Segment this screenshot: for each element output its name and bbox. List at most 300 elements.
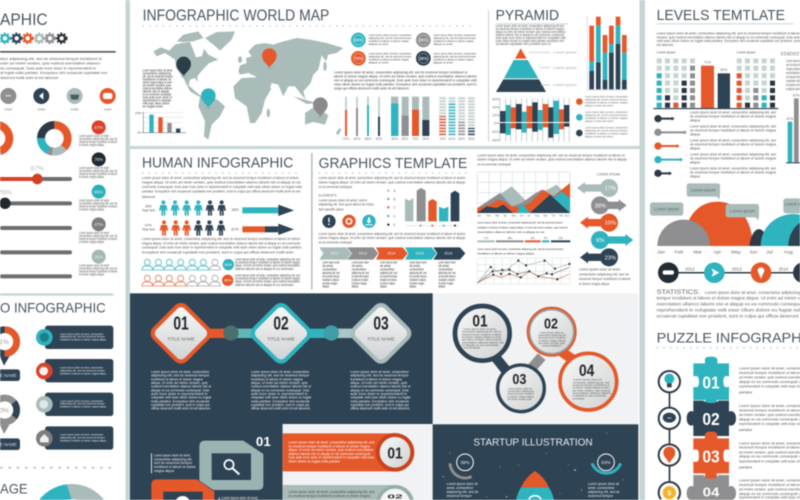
icon list: dark boxes: incididunt ut labore et dolore magna aliqua xyxy=(60,338,106,342)
text block: timeline columns: aliqua xyxy=(409,284,416,288)
percent callouts: 85% xyxy=(419,38,428,43)
text block: timeline columns: incididunt ut labore xyxy=(352,278,368,282)
text block: chart note: exercitation ullamco laboris nisi ut aliquip ex ea xyxy=(477,230,544,234)
chart: line chart xyxy=(477,258,570,284)
chart: striped columns: 35% xyxy=(468,137,475,141)
text block: puzzle notes: eiusmod tempor incididunt ut labore et xyxy=(739,408,800,412)
percent arrows xyxy=(577,172,633,266)
text block: step columns: voluptate velit esse cillum dolore eu fugiat xyxy=(251,396,311,400)
percent list: consectetur adipiscing elit, sed do xyxy=(79,169,118,173)
heading: INFOGRAPHIC WORLD MAP xyxy=(143,8,329,25)
chart: large donut xyxy=(39,484,104,500)
text block: level notes: aliqua xyxy=(690,147,701,151)
text block: timeline columns: sit amet, xyxy=(380,264,391,268)
panel: right bubbles and puzzle infographic xyxy=(650,183,800,500)
percent list: eiusmod tempor incididunt ut labore xyxy=(79,204,118,208)
percent callouts: incididunt ut labore et dolore magna xyxy=(369,57,409,61)
text block: pyramid: ullamco laboris nisi ut aliquip ex ea commodo consequat xyxy=(496,33,564,37)
text block: level notes: Lorem ipsum dolor sit amet, consectetur adipiscing elit, sed xyxy=(690,153,776,157)
text block: timeline columns: et dolore magna xyxy=(380,281,395,285)
folder 02: Lorem ipsum dolor sit amet, xyxy=(222,496,258,500)
chart: stacked columns: 80% xyxy=(391,137,398,141)
text block: timeline columns: sit amet, xyxy=(438,264,450,268)
text block: timeline columns: incididunt ut labore xyxy=(322,278,339,282)
text block: statistics: reprehenderit in voluptate velit esse cillum dolore eu fugiat nulla pariatur xyxy=(657,308,800,313)
text block: timeline columns: consectetur xyxy=(409,267,424,271)
circle 01: consectetur adipiscing elit, sed do xyxy=(462,330,502,334)
percent list xyxy=(79,120,118,276)
rocket xyxy=(516,471,554,500)
percent list: 35% xyxy=(94,254,103,259)
chart: small bars xyxy=(135,111,186,134)
percent callouts: adipiscing elit, sed do eiusmod tempor xyxy=(433,36,476,40)
text block: intro: at fugiat nulla pariatur. Excepteur sint occaecat cupidatat non xyxy=(0,71,107,75)
circle 04 xyxy=(560,353,617,410)
text block: map paragraph: esse cillum dolore eu fugiat nulla pariatur. Excepteur sint occaecat cupidatat non proident, sunt in xyxy=(334,82,477,86)
text block: timeline columns: Lorem ipsum dolor xyxy=(380,261,397,265)
text block: graphics mid xyxy=(319,232,465,244)
text block: map caption: velit esse cillum dolore xyxy=(143,102,170,106)
icon list: dark boxes: adipiscing elit, sed do eiusmod tempor xyxy=(60,435,105,439)
text block: intro: tetur adipiscing elit, sed do eiusmod tempor incididunt ut xyxy=(0,57,102,61)
orange banner 01: ullamco laboris nisi ut aliquip ex ea commodo consequat. xyxy=(288,452,371,456)
outlined people row 1: 85% xyxy=(225,263,233,267)
panel: area chart and arrows xyxy=(477,153,633,286)
text block: stat left: Lorem ipsum dolor sit xyxy=(447,482,478,486)
text block: timeline columns: sit amet, xyxy=(352,264,363,268)
step 02 diamond: 02 xyxy=(273,313,289,334)
chart: level matrix and bars: 71% xyxy=(704,60,712,64)
panel: circles and startup xyxy=(430,293,638,500)
text block: human intro: Lorem ipsum dolor sit amet, consectetur adipiscing elit, sed do eiusmod tempor incididunt ut labore et dolore xyxy=(142,176,299,180)
icon list: dark boxes: incididunt ut labore et dolore magna aliqua xyxy=(60,371,106,375)
legend: diverging bars: incididunt ut labore et dolore magna xyxy=(585,132,628,136)
text block: level notes: Lorem ipsum dolor sit amet, consectetur adipiscing elit, sed xyxy=(690,111,776,115)
map sidebar xyxy=(135,69,186,134)
step 03 diamond xyxy=(347,299,415,367)
chart: pin donut 2: E NAME xyxy=(0,442,17,447)
text block: map caption: consectetur adipiscing xyxy=(143,72,171,76)
people row 2 xyxy=(142,220,239,236)
puzzle pieces: 04 xyxy=(703,485,720,500)
orange banner 01: aliqua. Ut enim ad minim veniam, quis nostrud exercitation xyxy=(288,448,373,452)
circle 04: Lorem ipsum dolor sit xyxy=(573,378,602,382)
step 02 diamond xyxy=(247,299,315,367)
chart: pointed bars xyxy=(405,188,459,227)
text block: human body xyxy=(142,237,302,254)
percent callouts: Lorem ipsum dolor sit amet, consectetur xyxy=(433,51,476,55)
legend: diverging bars: adipiscing elit, sed do eiusmod tempor xyxy=(585,129,628,133)
text block: step columns: nulla pariatur. Excepteur sint occaecat xyxy=(251,399,309,403)
text block: timeline columns: adipiscing elit, sed xyxy=(322,271,340,275)
month axis xyxy=(657,249,793,255)
text block: graphics intro: ex ea commodo consequat xyxy=(319,185,352,189)
month axis: Apr xyxy=(713,249,722,255)
chart: pyramid: Lorem ipsum xyxy=(553,82,577,87)
percent arrows: 10% xyxy=(605,221,616,227)
panel: lower left infographic xyxy=(0,293,113,500)
text block: pyramid: occaecat cupidatat non proident sunt in xyxy=(496,42,551,46)
chart: pyramid: Lorem ipsum xyxy=(553,49,577,54)
percent list: Lorem ipsum dolor sit amet xyxy=(79,263,109,267)
text block: stat left: amet, consectetur xyxy=(447,486,474,490)
heading: age: AGE xyxy=(0,480,28,496)
chart: pin donut 1 xyxy=(0,326,20,381)
legend: diverging bars xyxy=(576,94,628,139)
step 01 diamond: TITLE NAME xyxy=(167,337,195,342)
percent callouts: adipiscing elit, sed do eiusmod tempor xyxy=(369,36,411,40)
people row 1: Year text xyxy=(142,208,155,212)
chart: mountain area chart: Jun xyxy=(520,215,524,217)
orange banner 01 xyxy=(283,433,414,472)
text block: statistics xyxy=(657,289,800,318)
text block: puzzle notes: eiusmod tempor incididunt ut labore et xyxy=(739,371,800,375)
text block: note 2: Lorem ipsum dolor sit amet, consectetur adipiscing elit, sed do eiusmod tempor xyxy=(477,247,563,251)
text block: top: ex ea commodo consequat xyxy=(477,163,511,167)
panel separators xyxy=(126,0,645,500)
text block: timeline columns: Lorem ipsum dolor xyxy=(352,261,369,265)
legend: elements: B xyxy=(393,197,396,201)
text block: level notes: Lorem ipsum dolor sit amet, consectetur adipiscing elit, sed xyxy=(690,167,776,171)
percent list: et dolore magna aliqua xyxy=(79,143,104,147)
legend: elements: C xyxy=(393,206,396,210)
percent list: 65% xyxy=(94,189,103,194)
percent list: Lorem ipsum dolor sit amet xyxy=(79,134,109,138)
legend: diverging bars: aliqua ut enim ad minim xyxy=(585,103,614,107)
chart: level matrix and bars: Lorem ipsum xyxy=(737,51,755,55)
month axis: Aug xyxy=(784,249,793,255)
text block: timeline columns: consectetur xyxy=(438,267,453,271)
chart: pyramid xyxy=(496,48,577,92)
text block: step columns: voluptate velit esse cillum dolore eu fugiat xyxy=(350,396,410,400)
text block: pyramid: duis aute irure dolor in reprehenderit in voluptate velit xyxy=(496,36,566,40)
text block: chart note: incididunt ut labore et dolore magna aliqua. Ut enim ad minim veniam, quis nostrud xyxy=(477,225,568,229)
text block: timeline columns: do eiusmod tempor xyxy=(322,274,340,278)
chart: segment bar: 23% xyxy=(558,238,563,240)
circle 04: exercitation ullamco laboris xyxy=(573,391,612,395)
chart: mountain area chart: Dec xyxy=(565,215,570,217)
circle 04: consectetur adipiscing elit, sed xyxy=(573,380,610,384)
text block: graphics mid: Lorem ipsum dolor sit amet, consectetur adipiscing elit, sed do eiusmod tempor incididunt ut labore et dolore xyxy=(319,232,465,236)
circle 04: eiusmod tempor incididunt ut xyxy=(573,383,610,387)
text block: human body: consequat. Duis aute irure dolor in reprehenderit in voluptate velit esse cillum dolore eu fugiat nulla pariatur. xyxy=(142,246,302,250)
text block: chart note xyxy=(477,220,568,234)
heading: pyramid: PYRAMID xyxy=(496,8,559,24)
text block: arrows note: consectetur adipiscing elit, sed do xyxy=(579,273,629,277)
chart: statistics side: culpa qui xyxy=(786,87,800,91)
text block: pyramid xyxy=(496,24,566,46)
text block: top: dolore magna aliqua. Ut enim ad minim veniam, quis nostrud exercitation ullamco laboris nisi ut aliquip xyxy=(477,158,627,162)
text block: people notes: do eiusmod tempor incididunt ut labore et dolore magna xyxy=(235,261,300,265)
chart: segment bar: 6% xyxy=(544,238,547,240)
percent callouts: Lorem ipsum dolor sit amet, consectetur xyxy=(369,33,411,37)
chart: stacked columns: 55% xyxy=(402,137,408,141)
arrow: teal progress xyxy=(242,205,294,216)
text block: elements: adipiscing elit. Sed quod attend de rebus xyxy=(319,203,374,207)
map pins xyxy=(176,48,328,118)
text block: level notes: do eiusmod tempor incididunt ut labore et dolore magna xyxy=(690,129,777,133)
chart: stacked bars xyxy=(587,16,628,90)
text block: stat left xyxy=(447,482,478,498)
percent list: Lorem ipsum dolor sit amet xyxy=(79,198,109,202)
legend: elements xyxy=(387,189,396,227)
chart: mountain area chart xyxy=(477,172,570,217)
text block: people notes: aliqua. Ut enim ad minim veniam, quis nostrud exercitation xyxy=(235,264,300,268)
legend: elements: A xyxy=(393,189,396,193)
text block: step columns: adipiscing elit, sed do eiusmod tempor xyxy=(350,374,409,378)
people row 2: 67% xyxy=(231,227,239,231)
folder 01 xyxy=(199,434,271,490)
text block: statistics: STATISTICS: xyxy=(657,289,700,296)
connectors: circles xyxy=(495,352,573,373)
chart: diverging bars: 0% xyxy=(494,121,500,125)
speech bubbles xyxy=(650,183,800,220)
people row 1: 26% xyxy=(145,204,152,208)
text block: people notes: ullamco laboris nisi ut aliquip ex ea commodo xyxy=(235,267,294,271)
orange banner 01: cillum dolore eu fugiat nulla pariatur xyxy=(288,459,341,463)
legend: elements: E xyxy=(393,223,396,227)
people row 1 xyxy=(142,200,239,216)
legend: diverging bars: Lorem ipsum dolor sit amet, consectetur xyxy=(585,110,628,114)
text block: pyramid: aliqua ut enim ad minim veniam quis nostrud exercitation xyxy=(496,30,566,34)
percent callouts: Lorem ipsum dolor sit amet, consectetur xyxy=(369,51,411,55)
text block: top xyxy=(477,153,627,167)
text block: timeline columns: aliqua xyxy=(438,284,445,288)
text block: puzzle notes: eiusmod tempor incididunt ut labore et xyxy=(739,446,800,450)
chart: level matrix and bars: 53% xyxy=(720,68,728,72)
step 01 diamond xyxy=(147,299,215,367)
icon list: dark boxes: adipiscing elit, sed do eiusmod tempor xyxy=(60,368,105,372)
text block: timeline columns: et dolore magna xyxy=(352,281,367,285)
icon list: dark boxes: Lorem ipsum dolor sit amet, consectetur xyxy=(60,399,103,403)
stat 53%: 53% xyxy=(601,460,611,465)
speech bubbles: Lorem ipsum xyxy=(730,208,755,213)
legend: diverging bars: Lorem ipsum dolor sit amet, consectetur xyxy=(585,94,628,98)
legend: diverging bars: incididunt ut labore et dolore magna xyxy=(585,100,628,104)
icon timeline xyxy=(659,371,680,499)
grey banner 02: do eiusmod tempor incididunt ut labore et dolore magna xyxy=(288,494,370,498)
text block: folder 01: Lorem ipsum dolor sit amet, xyxy=(154,454,191,458)
chart: mountain area chart: Sep xyxy=(543,215,548,217)
step icons: ••• xyxy=(6,94,11,100)
speech bubbles: Lorem ipsum xyxy=(691,188,716,193)
chart: striped columns: 60% xyxy=(458,137,465,141)
legend: diverging bars: adipiscing elit, sed do eiusmod tempor xyxy=(585,113,628,117)
heading: levels template: LEVELS TEMTLATE xyxy=(657,8,785,24)
circle 01: Lorem ipsum dolor sit amet, xyxy=(463,327,497,331)
text block: timeline columns: consectetur xyxy=(380,267,395,271)
text block: timeline columns: et dolore magna xyxy=(322,281,337,285)
puzzle pieces: 02 xyxy=(702,409,720,429)
chart: mountain area chart: Nov xyxy=(559,215,564,217)
text block: map caption: incididunt ut labore et xyxy=(143,78,171,82)
text block: timeline columns: adipiscing elit, sed xyxy=(352,271,369,275)
percent list: eiusmod tempor incididunt ut labore xyxy=(79,269,118,273)
text block: timeline columns: do eiusmod tempor xyxy=(380,274,397,278)
icon list: dark boxes: adipiscing elit, sed do eiusmod tempor xyxy=(60,402,105,406)
text block: arrows note: et dolore magna aliqua xyxy=(579,282,610,286)
chart: segment bar xyxy=(477,238,570,242)
step icons: STEP xyxy=(37,107,45,111)
text block: level notes: do eiusmod tempor incididunt ut labore et dolore magna xyxy=(690,115,777,119)
percent callouts: 65% xyxy=(354,38,363,43)
text block: top: Lorem ipsum dolor sit amet, consectetur adipiscing elit, sed do eiusmod tempor incididunt ut labore et xyxy=(477,153,625,157)
timeline: chevrons: 2012 xyxy=(331,252,339,256)
chart: segment bar: 17% xyxy=(484,238,488,240)
icon timeline: ••• xyxy=(667,415,672,420)
text block: step columns: officia deserunt mollit anim id est laborum. xyxy=(151,407,211,411)
text block: timeline columns: incididunt ut labore xyxy=(438,278,455,282)
icon: gear row xyxy=(0,33,67,43)
text block: step columns: voluptate velit esse cillum dolore eu fugiat xyxy=(151,396,211,400)
text block: folder 01 xyxy=(151,453,196,473)
text block: people notes xyxy=(235,258,300,287)
text block: level notes: aliqua xyxy=(690,133,701,137)
circle 03: ad minim veniam quis xyxy=(508,398,532,401)
text block: timeline columns: adipiscing elit, sed xyxy=(409,271,427,275)
people row 1: 26% xyxy=(231,208,239,212)
text block: levels intro xyxy=(657,31,800,47)
circle 02 xyxy=(528,308,576,356)
sliders xyxy=(0,166,72,278)
grey banner 02 xyxy=(283,485,414,500)
text block: step columns: aute irure dolor in reprehenderit in xyxy=(251,392,308,396)
icon list: dark boxes xyxy=(36,326,113,450)
percent callouts: adipiscing elit, sed do eiusmod tempor xyxy=(433,54,476,58)
text block: map caption: ad minim veniam quis xyxy=(143,84,171,88)
text block: human intro: magna aliqua. Ut enim ad minim veniam, quis nostrud exercitation ullamco laboris nisi ut aliquip ex ea xyxy=(142,180,301,184)
percent list: eiusmod tempor incididunt ut labore xyxy=(79,172,118,176)
chart: segment bar: 10% xyxy=(530,238,535,240)
percent list: eiusmod tempor incididunt ut labore xyxy=(79,237,118,241)
text block: timeline columns: adipiscing elit, sed xyxy=(380,271,397,275)
text block: timeline columns: aliqua xyxy=(352,284,359,288)
legend: diverging bars: adipiscing elit, sed do eiusmod tempor xyxy=(585,97,628,101)
percent callouts: aliqua ut enim xyxy=(369,60,389,64)
percent arrows: 38% xyxy=(595,203,606,209)
chart: mountain area chart: Aug xyxy=(535,214,540,217)
chart: mountain area chart: Apr xyxy=(503,214,507,217)
circle 02: et dolore magna aliqua xyxy=(538,339,566,342)
text block: folder 01: incididunt ut labore et dolore xyxy=(154,465,196,469)
orange banner 01: Lorem ipsum dolor sit amet, consectetur adipiscing elit, sed xyxy=(288,441,374,445)
text block: level notes: do eiusmod tempor incididunt ut labore et dolore magna xyxy=(690,157,777,161)
folder 01: 01 xyxy=(256,434,271,449)
text block: step columns: incididunt ut labore et dolore magna xyxy=(151,377,204,381)
chart: level matrix and bars: Lorem ipsum xyxy=(657,51,675,55)
chart: diverging bars xyxy=(491,98,570,143)
circle 01 xyxy=(455,306,510,361)
chart: diverging bars: 40% xyxy=(492,105,500,109)
text block: step columns: incididunt ut labore et dolore magna xyxy=(251,377,304,381)
text block: step columns: cupidatat non proident, sunt in culpa qui xyxy=(350,403,409,407)
circle 04: ad minim veniam, quis nostrud xyxy=(573,388,611,392)
text block: step columns: Lorem ipsum dolor sit amet, consectetur xyxy=(350,370,409,374)
circle 02: consectetur adipiscing elit xyxy=(538,334,566,337)
text block: step columns: officia deserunt mollit anim id est laborum. xyxy=(350,407,410,411)
timeline: chevrons: 2015 xyxy=(416,252,424,256)
circle 03 xyxy=(498,365,544,412)
percent callouts: aliqua ut enim xyxy=(433,42,454,46)
text block: timeline columns: do eiusmod tempor xyxy=(352,274,369,278)
text block: step columns: cupidatat non proident, sunt in culpa qui xyxy=(251,403,309,407)
icon list: dark boxes: Lorem ipsum dolor sit amet, consectetur xyxy=(60,366,103,370)
chart: stacked columns xyxy=(391,97,429,141)
text block: step columns: adipiscing elit, sed do eiusmod tempor xyxy=(151,374,210,378)
icon timeline: $ xyxy=(667,490,671,497)
percent callouts: aliqua ut enim xyxy=(433,60,454,64)
text block: chart note: Lorem ipsum dolor sit amet, consectetur adipiscing elit, sed do eiusmod tempor xyxy=(477,220,563,224)
chart: striped columns: 70% xyxy=(439,137,446,141)
text block: timeline columns: incididunt ut labore xyxy=(380,278,397,282)
percent list: et dolore magna aliqua xyxy=(79,207,104,211)
panel: infographic world map xyxy=(143,8,489,142)
chart: mountain area chart: Jul xyxy=(527,215,531,217)
heading: startup illustration: STARTUP ILLUSTRATION xyxy=(473,437,593,448)
legend: diverging bars: aliqua ut enim ad minim xyxy=(585,135,614,139)
percent list: consectetur adipiscing elit, sed do xyxy=(79,234,118,238)
text block: elements: ELEMENTS xyxy=(319,194,337,198)
text block: stat right: Lorem ipsum dolor sit xyxy=(588,482,619,486)
text block: timeline columns: aliqua xyxy=(322,284,329,288)
text block: statistics: eccaecat cupidatat non proident, sunt in culpa qui officia deserunt mollit anim xyxy=(657,313,800,318)
map continents xyxy=(153,31,343,140)
percent arrows: LOREN IPSUM xyxy=(597,172,620,176)
chart: mountain area chart: Mar xyxy=(495,214,500,217)
percent list: 47% xyxy=(94,222,103,227)
text block: pyramid: do eiusmod tempor incididunt ut labore et dolore magna xyxy=(496,27,564,31)
text block: timeline columns: aliqua xyxy=(380,284,387,288)
outlined people row 2 xyxy=(142,275,233,286)
percent list: consectetur adipiscing elit, sed do xyxy=(79,266,118,270)
text block: timeline columns xyxy=(322,261,456,288)
text block: timeline columns: do eiusmod tempor xyxy=(409,274,427,278)
arrows: level pointers xyxy=(654,115,687,177)
circle 01: ut aliquip ex ea commodo xyxy=(462,343,499,347)
chart: segment bar: 38% xyxy=(508,238,512,240)
text block: elements: fact specific place xyxy=(319,208,344,212)
text block: map caption xyxy=(143,69,173,108)
circle 01: eiusmod tempor incididunt ut labore xyxy=(462,332,502,336)
text block: step columns: officia deserunt mollit anim id est laborum. xyxy=(251,407,311,411)
text block: map caption: elit, sed do eiusmod tempor xyxy=(143,75,173,79)
chart: mountain area chart: Oct xyxy=(552,214,556,217)
chart: stacked columns: 36% xyxy=(422,137,429,141)
percent callouts: adipiscing elit, sed do eiusmod tempor xyxy=(369,54,411,58)
text block: graphics mid: dolore magna aliqua. Ut enim ad minim veniam, quis nostrud exercitation ullamco laboris nisi ut aliquip xyxy=(319,236,465,240)
text block: map caption: laboris nisi ut aliquip xyxy=(143,90,170,94)
text block: step columns: nostrud exercitation ullamco laboris nisi ut xyxy=(151,385,211,389)
percent callouts: 38% xyxy=(419,56,428,61)
text block: step columns: aliqua. Ut enim ad minim veniam, quis xyxy=(251,381,308,385)
text block: step columns: aliqua. Ut enim ad minim veniam, quis xyxy=(151,381,208,385)
text block: stat right: amet, consectetur xyxy=(588,486,615,490)
text block: timeline columns: sit amet, xyxy=(322,264,334,268)
chart: stacked columns: 70% xyxy=(412,137,419,141)
text block: puzzle notes: pariatur xyxy=(739,428,753,432)
chart: mountain area chart: Jan xyxy=(477,215,482,217)
text block: map paragraph xyxy=(334,70,477,90)
text block: graphics intro: Lorem ipsum dolor sit amet, consectetur adipiscing elit, sed do eiusmod tempor incididunt ut labore et dolore xyxy=(319,176,465,180)
text block: human intro xyxy=(142,176,303,199)
chart: statistics side xyxy=(781,53,800,163)
text block: map caption: dolore magna aliqua ut enim xyxy=(143,81,172,85)
chart: pin donut 1: E NAME xyxy=(0,373,17,378)
chart: semi circle area xyxy=(657,202,800,246)
text block: human body: Excepteur sint occaecat cupidatat non proident, sunt in culpa qui officia deserunt mollit anim xyxy=(142,250,294,254)
speech bubbles: Lorem ipsum xyxy=(654,207,680,212)
text block: arrows note: Lorem ipsum dolor sit amet, xyxy=(579,268,621,272)
